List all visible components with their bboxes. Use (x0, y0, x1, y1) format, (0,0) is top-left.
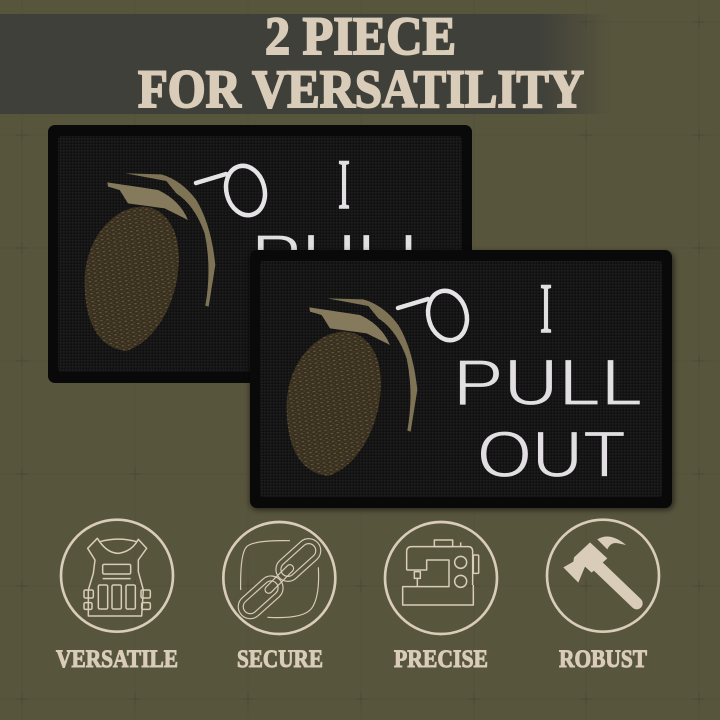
title (138, 6, 584, 119)
grenade: back (85, 173, 215, 351)
pull ring: front (398, 286, 472, 345)
patch: front (250, 250, 672, 508)
icon labels: ROBUST (559, 646, 647, 673)
icon labels: VERSATILE (56, 646, 178, 673)
icon: versatile vest (61, 520, 173, 632)
icon labels: SECURE (237, 646, 323, 673)
letter I: front: I (540, 270, 552, 348)
pull ring: back (196, 161, 270, 220)
patch shadow (250, 252, 674, 510)
patch text: front: OUT (477, 417, 626, 491)
title band (0, 14, 612, 114)
title: 2 PIECE (265, 6, 456, 66)
icon labels: PRECISE (394, 646, 488, 673)
title: FOR VERSATILITY (138, 59, 584, 119)
icon labels (56, 646, 647, 673)
icon: secure chain (223, 522, 335, 634)
grenade: front (287, 298, 417, 476)
letter I: back: I (338, 146, 350, 224)
icon: precise sewing machine (385, 522, 497, 634)
patch text: front (453, 345, 643, 491)
patch text: front: PULL (453, 345, 643, 419)
patch text: back: PULL (251, 220, 441, 294)
icon: robust hammer (547, 520, 659, 632)
patch: back (48, 125, 472, 383)
